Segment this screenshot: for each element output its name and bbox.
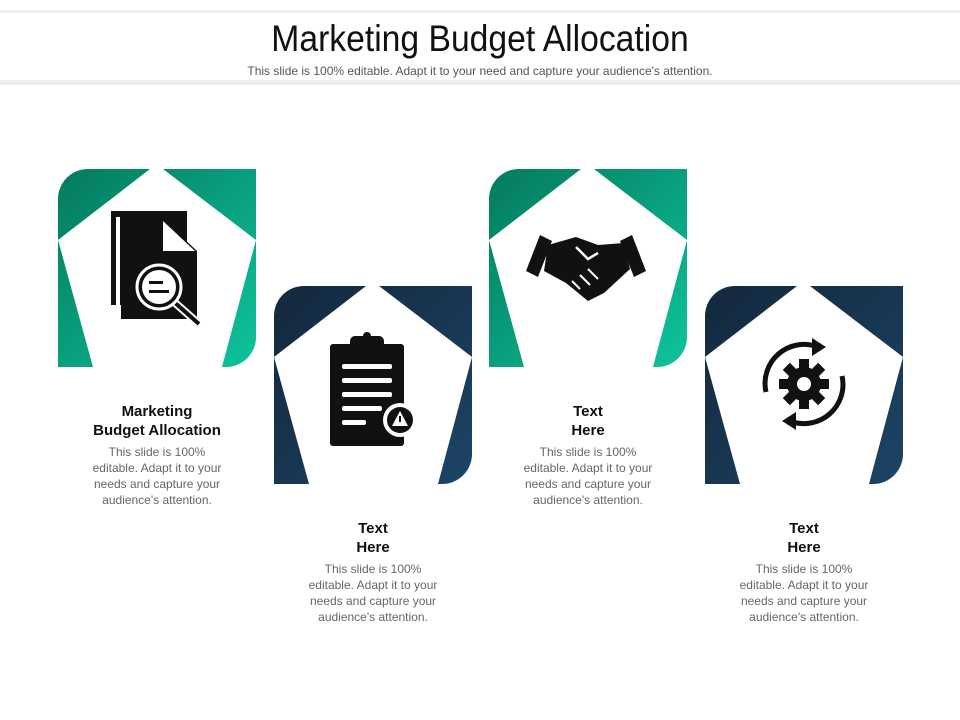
text block 4: editable. Adapt it to your [740,578,868,592]
text block 3: This slide is 100% [540,445,636,459]
text block 4 [740,520,868,624]
text block 2: Here [356,539,390,556]
top rule [0,10,960,13]
card 1 [58,169,256,367]
text block 3: Here [571,422,605,439]
icon: gear cycle [765,338,843,430]
text block 1: Marketing [122,403,192,420]
text block 2: This slide is 100% [325,562,421,576]
card 3 [489,169,687,367]
text block 1: This slide is 100% [109,445,205,459]
text block 1: needs and capture your [94,477,220,491]
text block 1 [93,403,222,507]
card 2 [274,286,472,484]
text block 3 [524,403,652,507]
icon: handshake [526,235,646,301]
text block 4: audience's attention. [749,610,859,624]
text block 2: editable. Adapt it to your [309,578,437,592]
card 4 [705,286,903,484]
text block 4: needs and capture your [741,594,867,608]
title: Marketing Budget Allocation [271,18,689,59]
text block 3: audience's attention. [533,493,643,507]
icon: document search [111,211,199,324]
text block 2: Text [358,520,388,537]
text block 1: editable. Adapt it to your [93,461,221,475]
text block 2: needs and capture your [310,594,436,608]
text block 4: Text [789,520,819,537]
text block 2: audience's attention. [318,610,428,624]
icon: clipboard warning [330,332,417,446]
text block 1: Budget Allocation [93,422,221,439]
text block 2 [309,520,438,624]
text block 3: editable. Adapt it to your [524,461,652,475]
text block 3: Text [573,403,603,420]
text block 3: needs and capture your [525,477,651,491]
text block 4: Here [787,539,821,556]
text block 4: This slide is 100% [756,562,852,576]
subtitle: This slide is 100% editable. Adapt it to your need and capture your audience's attention. [247,64,713,78]
bottom rule [0,80,960,85]
text block 1: audience's attention. [102,493,212,507]
